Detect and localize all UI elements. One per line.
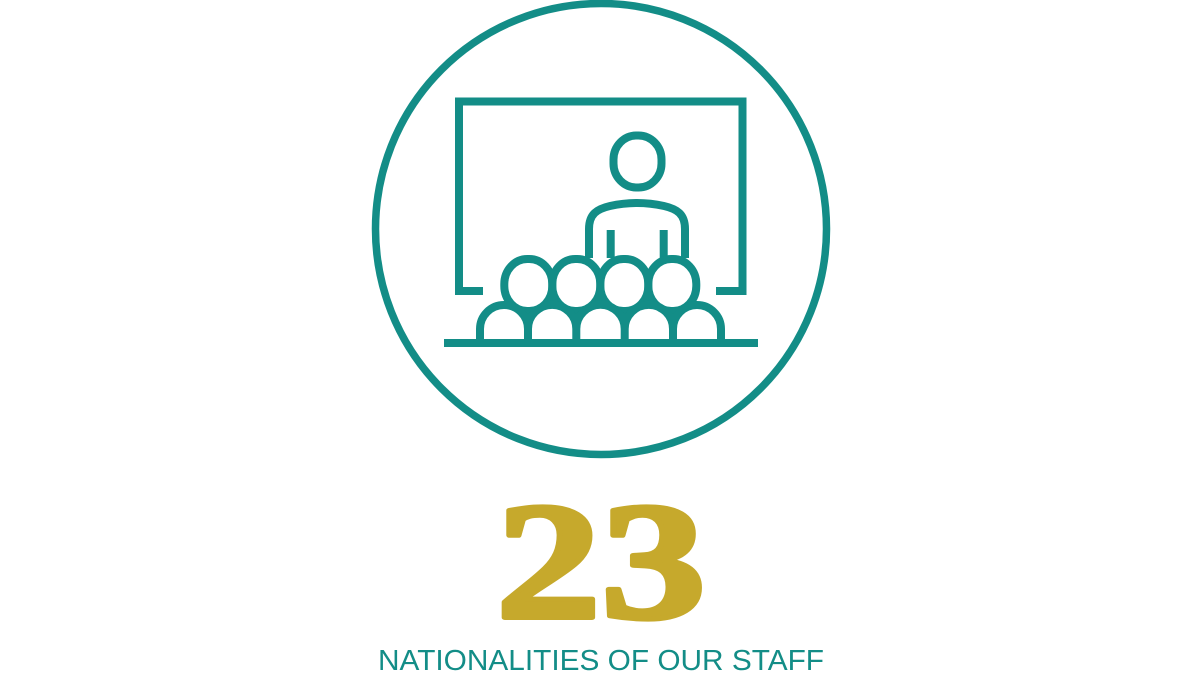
floor line: [444, 339, 758, 347]
ring: [376, 4, 826, 454]
audience front row: [480, 305, 721, 343]
presenter head: [614, 136, 662, 188]
presenter body: [589, 203, 685, 258]
audience back row: [504, 259, 696, 311]
screen frame: [459, 102, 742, 291]
big number: 23: [496, 470, 706, 654]
icon: circle with presenter and audience: [376, 4, 826, 454]
